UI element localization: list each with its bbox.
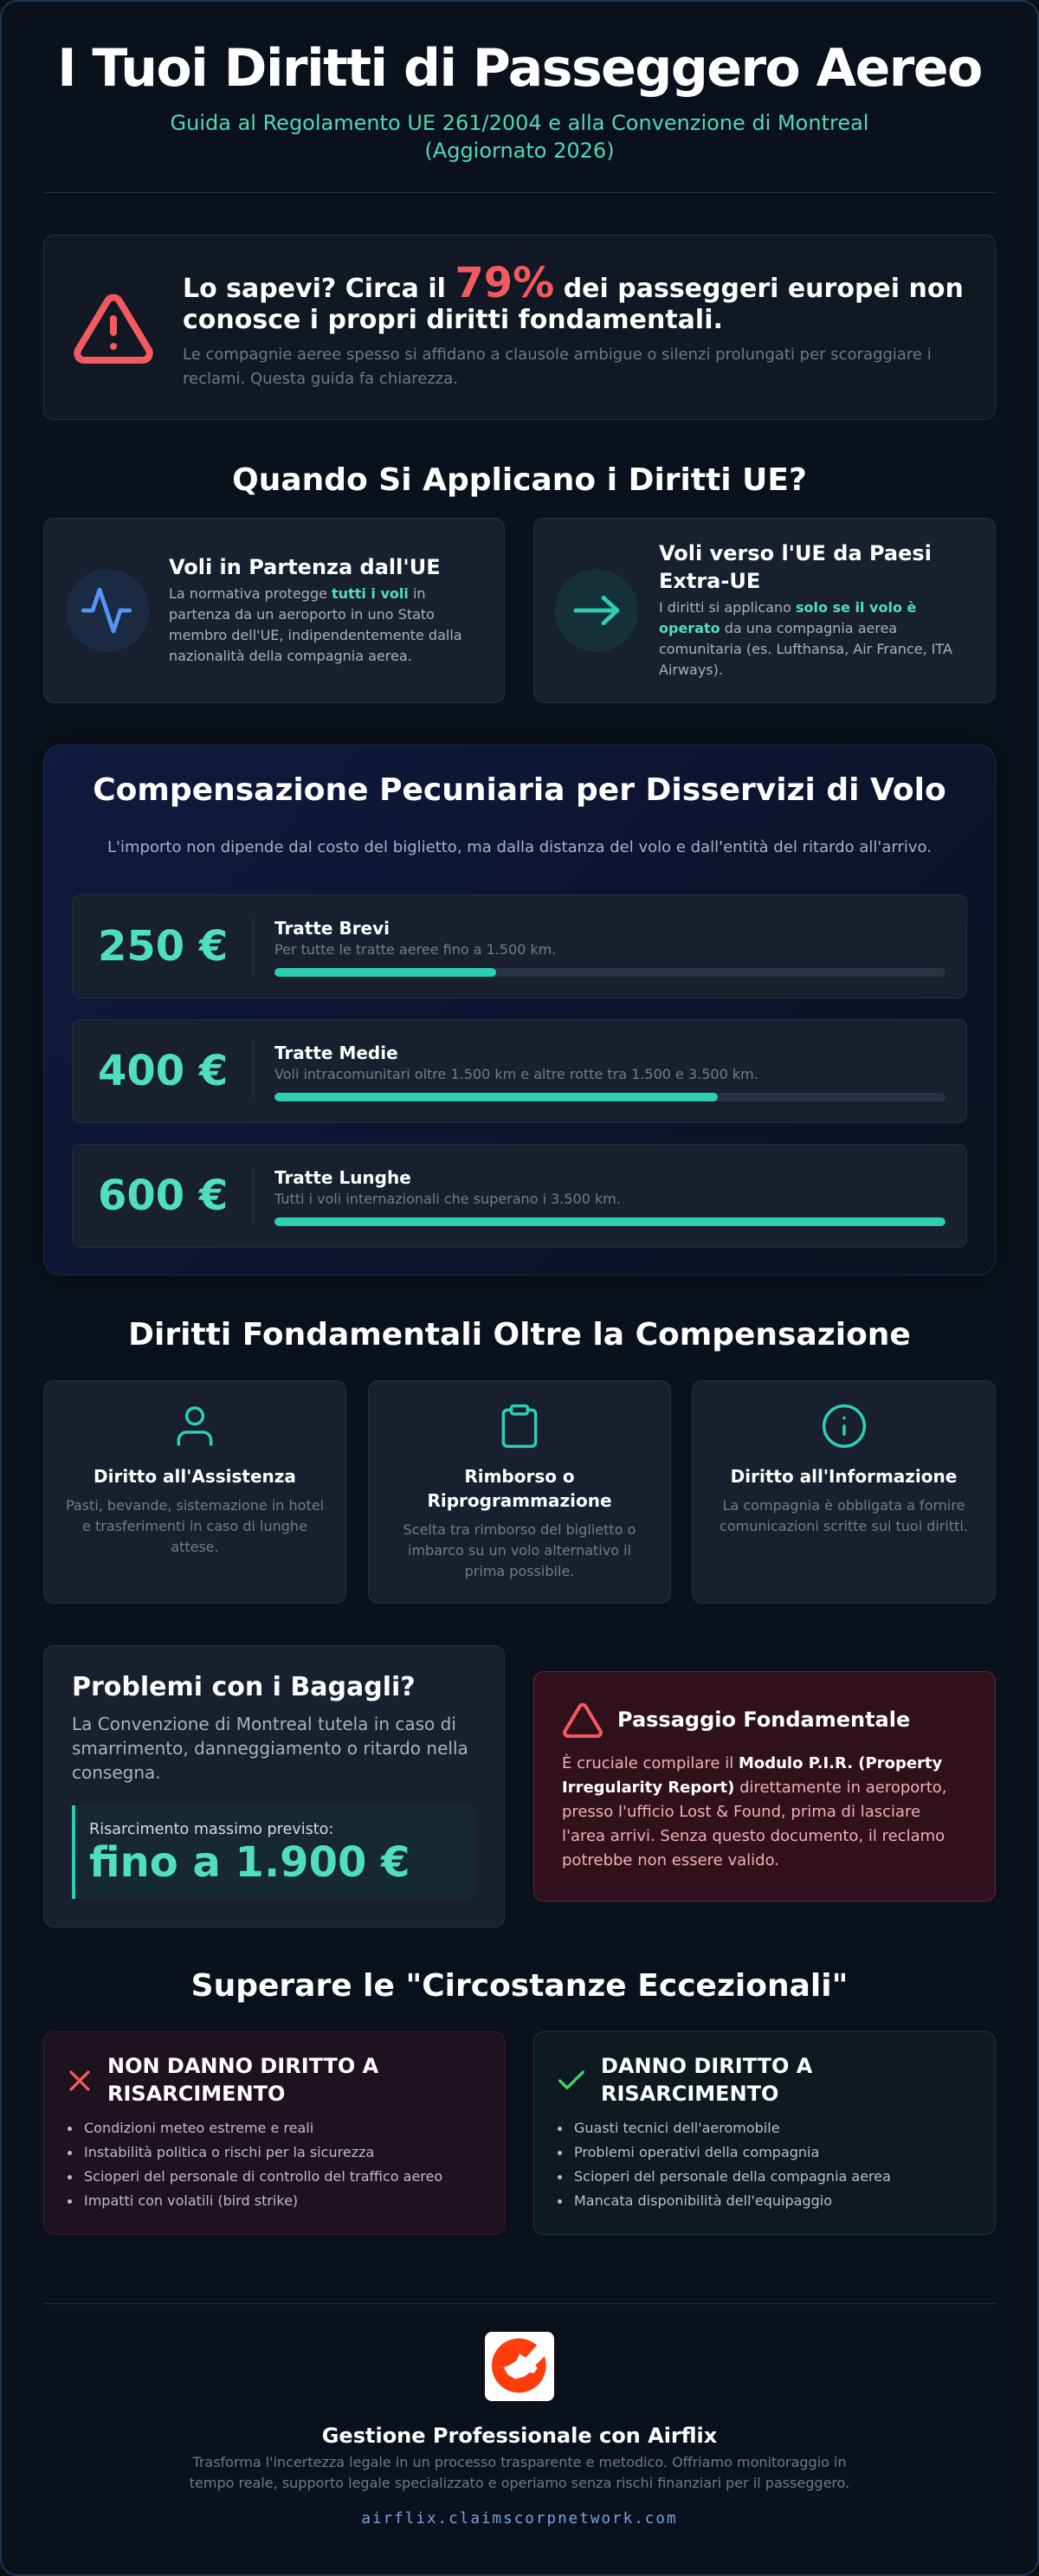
panel: compensation due: [533, 2031, 996, 2235]
icon: activity in circle: [66, 569, 149, 652]
card title: Voli in Partenza dall'UE: [169, 555, 441, 579]
bar: [274, 1217, 945, 1226]
card text: [659, 599, 952, 678]
subtitle: Guida al Regolamento UE 261/2004 e alla Convenzione di Montreal: [171, 111, 868, 135]
alert headline: conosce i propri diritti fondamentali.: [183, 305, 723, 334]
card text: partenza da un aeroporto in uno Stato: [169, 606, 435, 623]
panel: inbound flights: [533, 518, 996, 703]
panel text: [562, 1754, 947, 1869]
card title: Riprogrammazione: [427, 1490, 612, 1511]
footer text: [190, 2454, 849, 2491]
footer text: Trasforma l'incertezza legale in un processo trasparente e metodico. Offriamo monitoraggio in: [192, 2454, 847, 2470]
card text: nazionalità della compagnia aerea.: [169, 648, 412, 664]
icon: triangle: [563, 1702, 603, 1738]
alert description: [183, 345, 932, 388]
panel title: DANNO DIRITTO A: [601, 2054, 812, 2078]
section heading: Compensazione Pecuniaria per Disservizi di Volo: [93, 772, 946, 808]
panel: departing flights: [43, 518, 505, 703]
icon: check: [558, 2070, 585, 2090]
card title: [427, 1466, 612, 1511]
footer text: tempo reale, supporto legale specializzato e operiamo senza rischi finanziari per il passeggero.: [190, 2475, 849, 2491]
heading: when rights apply: Quando Si Applicano i Diritti UE?: [232, 462, 807, 498]
card text: operato da una compagnia aerea: [659, 620, 897, 636]
list item: Condizioni meteo estreme e reali: [84, 2120, 313, 2136]
card title: Diritto all'Assistenza: [94, 1466, 296, 1487]
subtitle: [171, 111, 868, 163]
panel text: l'area arrivi. Senza questo documento, il reclamo: [562, 1827, 945, 1845]
panel text: La Convenzione di Montreal tutela in caso di: [72, 1714, 456, 1734]
heading: fundamental rights: Diritti Fondamentali Oltre la Compensazione: [128, 1317, 911, 1353]
icon: info: [823, 1404, 866, 1448]
alert headline: Lo sapevi? Circa il 79% dei passeggeri europei non: [183, 259, 964, 307]
row: long routes: [72, 1144, 967, 1248]
list item: Impatti con volatili (bird strike): [84, 2192, 298, 2209]
card text: attese.: [171, 1539, 219, 1555]
row: medium routes: [72, 1019, 967, 1123]
card title: Extra-UE: [659, 569, 760, 593]
list item: Problemi operativi della compagnia: [574, 2144, 819, 2160]
card text: Scelta tra rimborso del biglietto o: [403, 1521, 636, 1538]
panel: right to assistance: [43, 1380, 346, 1604]
panel: key step: [533, 1671, 996, 1901]
panel text: Irregularity Report) direttamente in aeroporto,: [562, 1779, 947, 1797]
panel text: È cruciale compilare il Modulo P.I.R. (Property: [562, 1754, 942, 1772]
amount: 600 €: [98, 1172, 228, 1220]
card text: e trasferimenti in caso di lunghe: [82, 1518, 307, 1534]
alert description: Le compagnie aeree spesso si affidano a clausole ambigue o silenzi prolungati per scoraggiare i: [183, 345, 932, 364]
list item: Scioperi del personale di controllo del traffico aereo: [84, 2168, 442, 2185]
title: I Tuoi Diritti di Passeggero Aereo: [57, 38, 982, 99]
icon: cross: [69, 2070, 90, 2091]
card text: prima possibile.: [465, 1563, 574, 1579]
card text: [169, 585, 462, 664]
card text: Airways).: [659, 662, 723, 678]
icon: clipboard: [502, 1404, 537, 1448]
card text: I diritti si applicano solo se il volo è: [659, 599, 916, 616]
route label: Tratte Brevi: [274, 918, 390, 939]
card text: [720, 1497, 968, 1534]
bar: [274, 968, 945, 977]
card text: [66, 1497, 324, 1555]
card title: [659, 541, 932, 593]
panel: no compensation: [43, 2031, 505, 2235]
panel title: Passaggio Fondamentale: [617, 1708, 910, 1732]
panel: refund or rebooking: [368, 1380, 671, 1604]
footer link: airflix.claimscorpnetwork.com: [361, 2510, 678, 2528]
list item: Mancata disponibilità dell'equipaggio: [574, 2192, 832, 2209]
alert headline: [183, 259, 964, 334]
icon: person: [177, 1406, 213, 1446]
panel: baggage problems: [43, 1645, 505, 1927]
panel text: smarrimento, danneggiamento o ritardo nella: [72, 1738, 468, 1759]
panel text: presso l'ufficio Lost & Found, prima di lasciare: [562, 1803, 920, 1821]
panel title: RISARCIMENTO: [601, 2082, 778, 2106]
heading: exceptional circumstances: Superare le "Circostanze Eccezionali": [191, 1968, 848, 2004]
card text: Pasti, bevande, sistemazione in hotel: [66, 1497, 324, 1514]
amount: 250 €: [98, 922, 228, 971]
panel: monetary compensation: [43, 745, 996, 1275]
amount: 400 €: [98, 1047, 228, 1095]
panel title: NON DANNO DIRITTO A: [107, 2054, 378, 2078]
card text: La compagnia è obbligata a fornire: [723, 1497, 965, 1514]
route label: Tratte Medie: [274, 1043, 398, 1063]
alert description: reclami. Questa guida fa chiarezza.: [183, 370, 458, 388]
card text: comunitaria (es. Lufthansa, Air France, ITA: [659, 641, 952, 657]
logo: Airflix: [485, 2332, 554, 2401]
card title: Voli verso l'UE da Paesi: [659, 541, 932, 565]
panel text: [72, 1714, 468, 1783]
card title: Rimborso o: [464, 1466, 575, 1487]
card title: Diritto all'Informazione: [731, 1466, 957, 1487]
section intro: L'importo non dipende dal costo del biglietto, ma dalla distanza del volo e dall'entità del ritardo all'arrivo.: [107, 838, 932, 856]
panel title: RISARCIMENTO: [107, 2082, 285, 2106]
panel: did you know alert: [43, 235, 996, 420]
route description: Voli intracomunitari oltre 1.500 km e altre rotte tra 1.500 e 3.500 km.: [274, 1066, 758, 1082]
panel: right to information: [692, 1380, 996, 1604]
icon: warning triangle: [74, 294, 153, 364]
card text: imbarco su un volo alternativo il: [408, 1542, 631, 1559]
route description: Tutti i voli internazionali che superano i 3.500 km.: [274, 1191, 621, 1207]
list item: Guasti tecnici dell'aeromobile: [574, 2120, 780, 2136]
panel title: [107, 2054, 379, 2106]
card text: membro dell'UE, indipendentemente dalla: [169, 627, 462, 643]
row: short routes: [72, 894, 967, 998]
callout: maximum compensation: [72, 1805, 476, 1899]
card text: comunicazioni scritte sui tuoi diritti.: [720, 1518, 968, 1534]
panel title: Problemi con i Bagagli?: [72, 1672, 416, 1702]
list item: Scioperi del personale della compagnia aerea: [574, 2168, 891, 2185]
route description: Per tutte le tratte aeree fino a 1.500 km.: [274, 941, 556, 958]
panel text: consegna.: [72, 1762, 161, 1783]
footer title: Gestione Professionale con Airflix: [322, 2424, 717, 2448]
subtitle: (Aggiornato 2026): [424, 139, 615, 163]
callout amount: fino a 1.900 €: [89, 1838, 410, 1887]
list item: Instabilità politica o rischi per la sicurezza: [84, 2144, 374, 2160]
icon: arrow in circle: [555, 569, 638, 652]
panel text: potrebbe non essere valido.: [562, 1851, 779, 1869]
card text: [403, 1521, 636, 1579]
panel title: [601, 2054, 812, 2106]
bar: [274, 1093, 945, 1101]
callout label: Risarcimento massimo previsto:: [89, 1821, 333, 1838]
card text: La normativa protegge tutti i voli in: [169, 585, 426, 602]
route label: Tratte Lunghe: [274, 1167, 411, 1188]
